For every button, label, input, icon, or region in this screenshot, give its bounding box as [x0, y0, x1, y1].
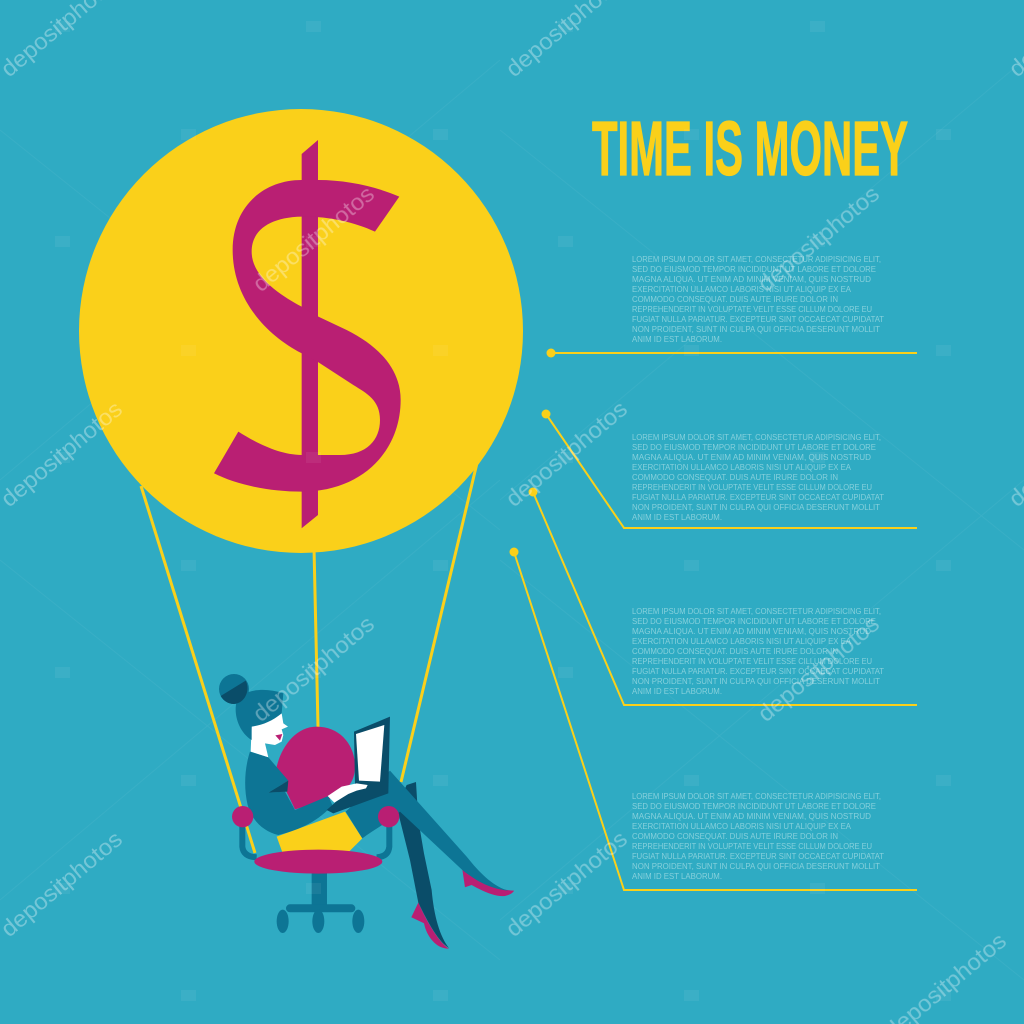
- text block 2: EXERCITATION ULLAMCO LABORIS NISI UT ALIQUIP EX EA: [632, 463, 852, 472]
- text block 3: [632, 607, 884, 696]
- text block 2: LOREM IPSUM DOLOR SIT AMET, CONSECTETUR ADIPISICING ELIT,: [632, 433, 881, 442]
- text block 4: REPREHENDERIT IN VOLUPTATE VELIT ESSE CILLUM DOLORE EU: [632, 842, 872, 851]
- text block 2: FUGIAT NULLA PARIATUR. EXCEPTEUR SINT OCCAECAT CUPIDATAT: [632, 493, 884, 502]
- skirt: [277, 812, 362, 855]
- leader line 3: [528, 488, 917, 705]
- text block 4: COMMODO CONSEQUAT. DUIS AUTE IRURE DOLOR IN: [632, 832, 838, 841]
- jacket: [245, 752, 332, 835]
- text block 2: MAGNA ALIQUA. UT ENIM AD MINIM VENIAM, QUIS NOSTRUD: [632, 453, 871, 462]
- leader line 1: [546, 348, 917, 358]
- laptop: [327, 717, 390, 813]
- text block 3: MAGNA ALIQUA. UT ENIM AD MINIM VENIAM, QUIS NOSTRUD: [632, 627, 871, 636]
- text block 1: LOREM IPSUM DOLOR SIT AMET, CONSECTETUR ADIPISICING ELIT,: [632, 255, 881, 264]
- text block 1: COMMODO CONSEQUAT. DUIS AUTE IRURE DOLOR IN: [632, 295, 838, 304]
- text block 1: FUGIAT NULLA PARIATUR. EXCEPTEUR SINT OCCAECAT CUPIDATAT: [632, 315, 884, 324]
- watermarks: depositphotos: [248, 610, 379, 727]
- balloon-shaped magenta cushion: [276, 727, 355, 809]
- text block 3: COMMODO CONSEQUAT. DUIS AUTE IRURE DOLOR IN: [632, 647, 838, 656]
- text block 1: ANIM ID EST LABORUM.: [632, 335, 722, 344]
- text block 4: EXERCITATION ULLAMCO LABORIS NISI UT ALIQUIP EX EA: [632, 822, 852, 831]
- text block 1: REPREHENDERIT IN VOLUPTATE VELIT ESSE CILLUM DOLORE EU: [632, 305, 872, 314]
- text block 2: SED DO EIUSMOD TEMPOR INCIDIDUNT UT LABORE ET DOLORE: [632, 443, 876, 452]
- text block 1: MAGNA ALIQUA. UT ENIM AD MINIM VENIAM, QUIS NOSTRUD: [632, 275, 871, 284]
- text block 2: [632, 433, 884, 522]
- watermarks: depositphotos: [753, 610, 884, 727]
- text block 3: SED DO EIUSMOD TEMPOR INCIDIDUNT UT LABORE ET DOLORE: [632, 617, 876, 626]
- watermarks: depositphotos: [501, 395, 632, 512]
- text block 4: NON PROIDENT, SUNT IN CULPA QUI OFFICIA DESERUNT MOLLIT: [632, 862, 880, 871]
- text block 4: LOREM IPSUM DOLOR SIT AMET, CONSECTETUR ADIPISICING ELIT,: [632, 792, 881, 801]
- watermarks: depositphotos: [501, 825, 632, 942]
- chair seat: [254, 850, 382, 874]
- text block 3: FUGIAT NULLA PARIATUR. EXCEPTEUR SINT OCCAECAT CUPIDATAT: [632, 667, 884, 676]
- text block 3: LOREM IPSUM DOLOR SIT AMET, CONSECTETUR ADIPISICING ELIT,: [632, 607, 881, 616]
- businesswoman on office chair with laptop: [219, 674, 514, 949]
- office chair: [242, 823, 389, 933]
- leader line 4: [510, 548, 917, 890]
- watermarks: depositphotos: [248, 180, 379, 297]
- near leg and shoe: [346, 771, 514, 896]
- text block 2: REPREHENDERIT IN VOLUPTATE VELIT ESSE CILLUM DOLORE EU: [632, 483, 872, 492]
- chair armrest knobs: [232, 806, 399, 827]
- text block 2: COMMODO CONSEQUAT. DUIS AUTE IRURE DOLOR IN: [632, 473, 838, 482]
- text block 1: SED DO EIUSMOD TEMPOR INCIDIDUNT UT LABORE ET DOLORE: [632, 265, 876, 274]
- text block 2: ANIM ID EST LABORUM.: [632, 513, 722, 522]
- text block 3: NON PROIDENT, SUNT IN CULPA QUI OFFICIA DESERUNT MOLLIT: [632, 677, 880, 686]
- text block 3: REPREHENDERIT IN VOLUPTATE VELIT ESSE CILLUM DOLORE EU: [632, 657, 872, 666]
- balloon ropes: [141, 463, 477, 853]
- far leg: [397, 782, 449, 949]
- icon: dollar sign: [214, 140, 401, 528]
- watermarks: depositphotos: [753, 180, 884, 297]
- text block 4: ANIM ID EST LABORUM.: [632, 872, 722, 881]
- text block 4: FUGIAT NULLA PARIATUR. EXCEPTEUR SINT OCCAECAT CUPIDATAT: [632, 852, 884, 861]
- text block 4: SED DO EIUSMOD TEMPOR INCIDIDUNT UT LABORE ET DOLORE: [632, 802, 876, 811]
- leader line 2: [542, 410, 917, 528]
- text block 4: MAGNA ALIQUA. UT ENIM AD MINIM VENIAM, QUIS NOSTRUD: [632, 812, 871, 821]
- balloon: yellow coin: [79, 109, 523, 553]
- text block 1: EXERCITATION ULLAMCO LABORIS NISI UT ALIQUIP EX EA: [632, 285, 852, 294]
- text block 4: [632, 792, 884, 881]
- text block 3: ANIM ID EST LABORUM.: [632, 687, 722, 696]
- text block 1: NON PROIDENT, SUNT IN CULPA QUI OFFICIA DESERUNT MOLLIT: [632, 325, 880, 334]
- text block 3: EXERCITATION ULLAMCO LABORIS NISI UT ALIQUIP EX EA: [632, 637, 852, 646]
- head, hair and neck: [219, 674, 288, 757]
- text block 1: [632, 255, 884, 344]
- hand: [328, 783, 368, 803]
- text block 2: NON PROIDENT, SUNT IN CULPA QUI OFFICIA DESERUNT MOLLIT: [632, 503, 880, 512]
